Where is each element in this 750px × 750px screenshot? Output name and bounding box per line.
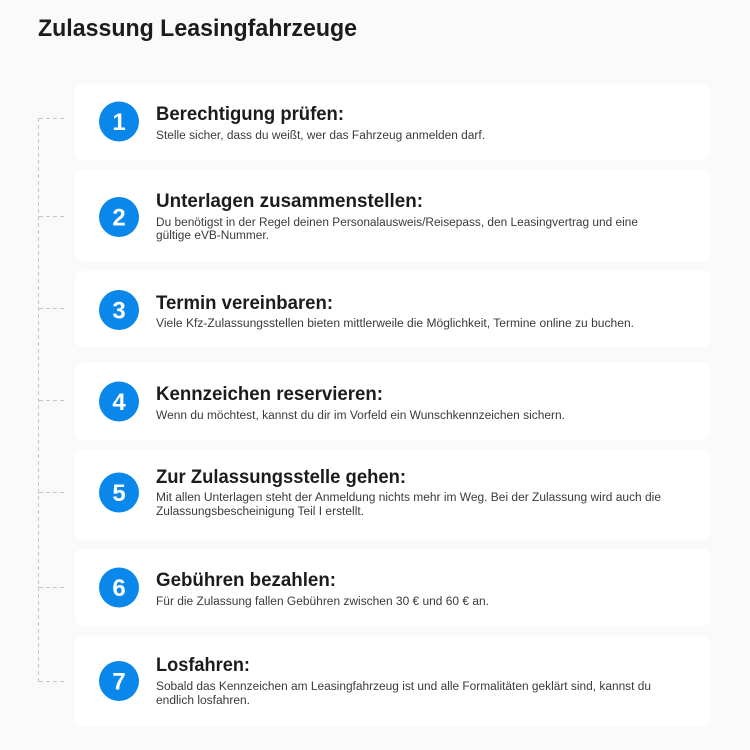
text: step 4: Wenn du möchtest, kannst du dir im Vorfeld ein Wunschkennzeichen sichern. xyxy=(156,410,565,422)
panel: step 2 xyxy=(75,170,710,261)
icon: number 2: 2 xyxy=(112,204,126,232)
heading: step 1: Berechtigung prüfen: xyxy=(156,103,344,125)
icon: number 3: 3 xyxy=(112,298,126,324)
panel: step 4 xyxy=(75,363,710,440)
text: step 7: endlich losfahren. xyxy=(156,695,250,707)
heading: step 6: Gebühren bezahlen: xyxy=(156,569,336,591)
text: step 1: Stelle sicher, dass du weißt, wer das Fahrzeug anmelden darf. xyxy=(156,130,485,142)
text: step 6: Für die Zulassung fallen Gebühren zwischen 30 € und 60 € an. xyxy=(156,596,489,608)
text: step 5 xyxy=(156,492,661,518)
icon: number 6: 6 xyxy=(112,575,126,602)
icon: number 5: 5 xyxy=(112,480,126,507)
icon: number 3 xyxy=(99,290,139,330)
text: step 7: Sobald das Kennzeichen am Leasingfahrzeug ist und alle Formalitäten geklärt sind, kannst du xyxy=(156,681,651,693)
heading: step 5: Zur Zulassungsstelle gehen: xyxy=(156,466,406,488)
panel: step 3 xyxy=(75,271,710,347)
icon: number 4 xyxy=(99,382,139,422)
title: Zulassung Leasingfahrzeuge xyxy=(38,15,357,42)
heading: step 2: Unterlagen zusammenstellen: xyxy=(156,190,423,212)
icon: number 1: 1 xyxy=(112,109,126,136)
icon: number 5 xyxy=(99,472,139,512)
heading: step 4: Kennzeichen reservieren: xyxy=(156,383,383,405)
text: step 2: Du benötigst in der Regel deinen Personalausweis/Reisepass, den Leasingvertrag und eine xyxy=(156,217,638,229)
icon: number 1 xyxy=(99,102,139,142)
panel: step 6 xyxy=(75,549,710,626)
text: step 2: gültige eVB-Nummer. xyxy=(156,230,269,242)
icon: number 4: 4 xyxy=(112,389,126,416)
icon: number 7: 7 xyxy=(112,668,126,696)
dashed connector xyxy=(38,118,65,682)
text: step 5: Zulassungsbescheinigung Teil I erstellt. xyxy=(156,506,364,518)
heading: step 3: Termin vereinbaren: xyxy=(156,292,333,314)
text: step 3: Viele Kfz-Zulassungsstellen bieten mittlerweile die Möglichkeit, Termine online zu buchen. xyxy=(156,318,634,330)
icon: number 2 xyxy=(99,197,139,237)
heading: step 7: Losfahren: xyxy=(156,654,250,676)
panel: step 5 xyxy=(75,449,710,540)
text: step 7 xyxy=(156,681,651,707)
text: step 5: Mit allen Unterlagen steht der Anmeldung nichts mehr im Weg. Bei der Zulassung wird auch die xyxy=(156,492,661,504)
panel: step 1 xyxy=(75,84,710,160)
panel: step 7 xyxy=(75,636,710,727)
icon: number 6 xyxy=(99,568,139,608)
icon: number 7 xyxy=(99,661,139,701)
text: step 2 xyxy=(156,217,638,242)
